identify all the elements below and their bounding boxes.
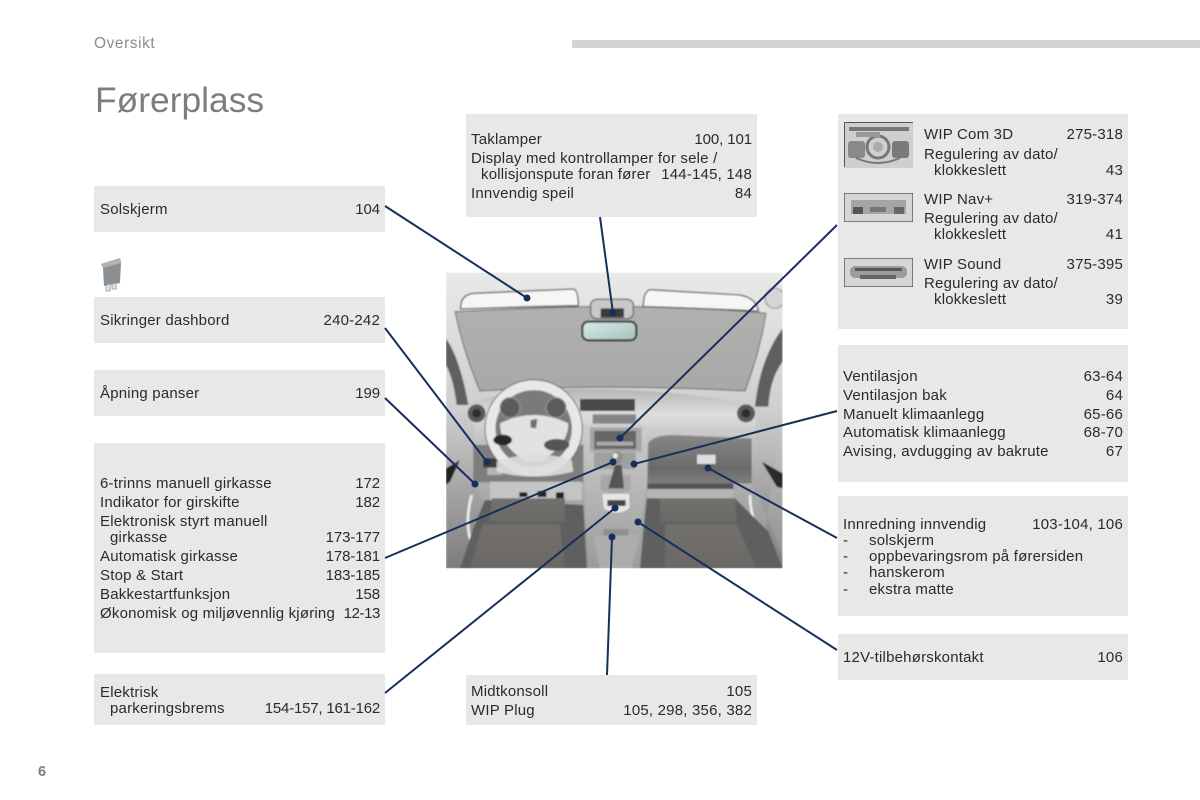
panel: Midtkonsoll: 105 [726, 683, 752, 700]
icon: fuse [101, 258, 121, 292]
callout lines [385, 206, 837, 693]
air vents [468, 404, 486, 422]
panel: 12V-tilbehørskontakt: 106 [1097, 649, 1123, 666]
diagram: car interior with callout lines [384, 205, 838, 694]
icon: WIP Com 3D unit [844, 122, 913, 168]
panel: WIP audio systems [838, 114, 1128, 329]
panel: WIP audio systems: klokkeslett [934, 226, 1006, 243]
panel: girkasse: Indikator for girskifte [100, 494, 240, 511]
panel: girkasse [94, 443, 385, 653]
callout: Innredning [704, 464, 837, 538]
panel: girkasse: 182 [355, 494, 380, 511]
panel: Midtkonsoll [466, 675, 757, 725]
section label: Oversikt: Oversikt [94, 35, 155, 52]
callout: girkasse [385, 458, 616, 558]
panel: girkasse: 6-trinns manuell girkasse [100, 475, 272, 492]
panel: Taklamper: Taklamper [471, 131, 542, 148]
steering wheel [495, 390, 572, 444]
seats [460, 500, 587, 568]
callout: Taklamper [600, 217, 616, 316]
panel: WIP audio systems: Regulering av dato/ [924, 210, 1058, 227]
panel: Åpning panser: 199 [355, 385, 380, 402]
page number: 6 [38, 764, 46, 780]
panel: girkasse: 158 [355, 586, 380, 603]
panel: girkasse: girkasse [110, 529, 167, 546]
panel: Sikringer dashbord [94, 297, 385, 343]
panel: Ventilasjon: 63-64 [1084, 368, 1123, 385]
panel: Innredning innvendig: - [843, 532, 848, 549]
panel: Midtkonsoll: WIP Plug [471, 702, 535, 719]
panel: Åpning panser [94, 370, 385, 416]
panel: Solskjerm [94, 186, 385, 232]
ceiling console [591, 299, 633, 319]
icon: WIP Sound unit [844, 258, 913, 287]
panel: girkasse: Økonomisk og miljøvennlig kjøring [100, 605, 335, 622]
panel: Elektrisk parkeringsbrems: Elektrisk [100, 684, 158, 701]
panel: Solskjerm: Solskjerm [100, 201, 168, 218]
panel: Taklamper: 84 [735, 185, 752, 202]
callout: Sikringer [385, 328, 490, 466]
panel: Midtkonsoll: 105, 298, 356, 382 [623, 702, 752, 719]
panel: Innredning innvendig: 103-104, 106 [1032, 516, 1123, 533]
mirror [582, 322, 636, 340]
panel: Innredning innvendig: oppbevaringsrom på førersiden [869, 548, 1083, 565]
panel: Ventilasjon: 67 [1106, 443, 1123, 460]
panel: Elektrisk parkeringsbrems [94, 674, 385, 725]
panel: WIP audio systems: 41 [1106, 226, 1123, 243]
title: Førerplass [95, 80, 264, 120]
panel: Elektrisk parkeringsbrems: 154-157, 161-162 [265, 700, 380, 717]
panel: WIP audio systems: Regulering av dato/ [924, 275, 1058, 292]
panel: Taklamper [466, 114, 757, 217]
sun visors [461, 289, 578, 309]
panel: WIP audio systems: WIP Nav+ [924, 191, 993, 208]
callout: Åpning panser [385, 398, 478, 488]
panel: Åpning panser: Åpning panser [100, 385, 199, 402]
panel: WIP audio systems: 375-395 [1067, 256, 1123, 273]
lower dash left [473, 445, 583, 482]
panel: WIP audio systems: WIP Sound [924, 256, 1001, 273]
panel: girkasse: Elektronisk styrt manuell [100, 513, 268, 530]
panel: Sikringer dashbord: 240-242 [324, 312, 380, 329]
panel: Ventilasjon: Ventilasjon [843, 368, 918, 385]
panel: Innredning innvendig: Innredning innvendig [843, 516, 986, 533]
panel: girkasse: 173-177 [326, 529, 380, 546]
glove box [647, 435, 752, 483]
panel: WIP audio systems: klokkeslett [934, 291, 1006, 308]
centre console [585, 443, 646, 568]
panel: Taklamper: kollisjonspute foran fører [481, 166, 650, 183]
panel: Ventilasjon: Automatisk klimaanlegg [843, 424, 1006, 441]
panel: Innredning innvendig: hanskerom [869, 564, 945, 581]
panel: Sikringer dashbord: Sikringer dashbord [100, 312, 230, 329]
panel: girkasse: 178-181 [326, 548, 380, 565]
panel: girkasse: Automatisk girkasse [100, 548, 238, 565]
callout: 12V [634, 518, 837, 650]
panel: Ventilasjon [838, 345, 1128, 482]
panel: Taklamper: 144-145, 148 [661, 166, 752, 183]
panel: WIP audio systems: 43 [1106, 162, 1123, 179]
callout: Solskjerm [385, 206, 530, 302]
panel: Ventilasjon: Manuelt klimaanlegg [843, 406, 984, 423]
panel: Elektrisk parkeringsbrems: parkeringsbrems [110, 700, 225, 717]
callout: Elektrisk parkeringsbrems [385, 504, 618, 693]
icon: WIP Nav+ unit [844, 193, 913, 222]
panel: WIP audio systems: WIP Com 3D [924, 126, 1013, 143]
panel: Innredning innvendig [838, 496, 1128, 616]
panel: Midtkonsoll: Midtkonsoll [471, 683, 548, 700]
doors [446, 408, 483, 568]
callout: Ventilasjon [630, 411, 837, 468]
windshield [455, 307, 766, 391]
footwell [490, 482, 582, 500]
panel: Taklamper: Display med kontrollamper for sele / [471, 150, 717, 167]
panel: WIP audio systems: Regulering av dato/ [924, 146, 1058, 163]
car interior illustration [446, 272, 785, 568]
panel: Innredning innvendig: solskjerm [869, 532, 934, 549]
panel: girkasse: 12-13 [344, 605, 380, 622]
panel: Innredning innvendig: - [843, 581, 848, 598]
panel: Innredning innvendig: ekstra matte [869, 581, 954, 598]
gear lever [601, 475, 631, 492]
panel: Taklamper: Innvendig speil [471, 185, 574, 202]
panel: girkasse: 183-185 [326, 567, 380, 584]
panel: WIP audio systems: 275-318 [1067, 126, 1123, 143]
panel: Ventilasjon: Avising, avdugging av bakrute [843, 443, 1049, 460]
header bar [572, 40, 1200, 48]
callout: Midtkonsoll [607, 534, 616, 675]
panel: girkasse: 172 [355, 475, 380, 492]
dashboard [474, 388, 756, 430]
panel: Ventilasjon: Ventilasjon bak [843, 387, 947, 404]
panel: Innredning innvendig: - [843, 548, 848, 565]
panel: WIP audio systems: 39 [1106, 291, 1123, 308]
panel: Ventilasjon: 68-70 [1084, 424, 1123, 441]
panel: Taklamper: 100, 101 [694, 131, 752, 148]
panel: girkasse: Bakkestartfunksjon [100, 586, 230, 603]
panel: Solskjerm: 104 [355, 201, 380, 218]
panel: Ventilasjon: 65-66 [1084, 406, 1123, 423]
panel: Innredning innvendig: - [843, 564, 848, 581]
panel: Ventilasjon: 64 [1106, 387, 1123, 404]
panel: WIP audio systems: klokkeslett [934, 162, 1006, 179]
panel: WIP audio systems: 319-374 [1067, 191, 1123, 208]
panel: 12V-tilbehørskontakt [838, 634, 1128, 680]
pillars [446, 338, 468, 405]
panel: girkasse: Stop & Start [100, 567, 183, 584]
callout: WIP [616, 225, 837, 442]
panel: 12V-tilbehørskontakt: 12V-tilbehørskontakt [843, 649, 984, 666]
